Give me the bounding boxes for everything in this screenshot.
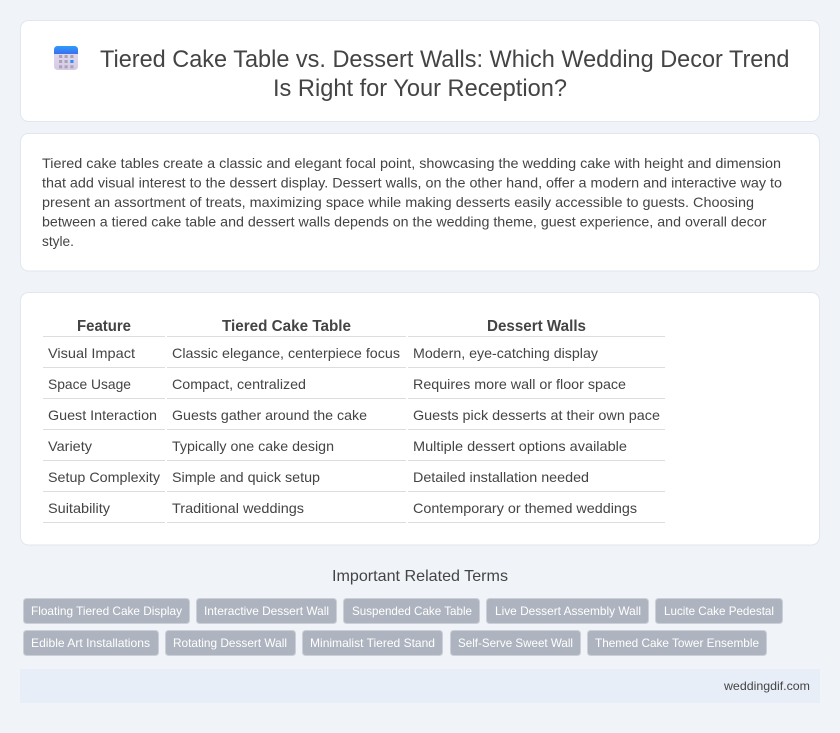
row: guest interaction	[48, 407, 660, 423]
row: visual impact: Visual Impact	[48, 345, 135, 361]
row: setup complexity	[48, 469, 589, 485]
row: setup complexity: Detailed installation needed	[413, 469, 589, 485]
row: space usage: Requires more wall or floor space	[413, 376, 626, 392]
row: suitability: Traditional weddings	[172, 500, 304, 516]
tag: Floating Tiered Cake Display	[31, 604, 182, 618]
panel: comparison table	[20, 292, 820, 545]
tag	[24, 598, 190, 624]
tag: Rotating Dessert Wall	[173, 636, 287, 650]
row: space usage: Space Usage	[48, 376, 131, 392]
row: variety	[48, 438, 627, 454]
tag: Themed Cake Tower Ensemble	[595, 636, 759, 650]
text block: description	[42, 155, 782, 249]
row: guest interaction: Guest Interaction	[48, 407, 157, 423]
table header	[77, 318, 586, 335]
row: visual impact: Classic elegance, centerpiece focus	[172, 345, 400, 361]
tag: Lucite Cake Pedestal	[664, 604, 774, 618]
text block: description: present an assortment of treats, maximizing space while making desserts easily accessible to guests. Choosing	[42, 194, 754, 210]
text block: description: that add visual interest to the dessert display. Dessert walls, on the other hand, offer a modern and interactive way to	[42, 174, 782, 190]
row: guest interaction: Guests gather around the cake	[172, 407, 367, 423]
tag: Interactive Dessert Wall	[204, 604, 329, 618]
tag	[486, 598, 648, 624]
row: space usage	[48, 376, 626, 392]
tag	[302, 630, 442, 656]
tag	[656, 598, 782, 624]
tag	[588, 630, 766, 656]
tag	[344, 598, 480, 624]
icon: calendar	[54, 46, 78, 70]
tag: Minimalist Tiered Stand	[310, 636, 435, 650]
panel: description	[20, 134, 820, 271]
tag	[166, 630, 296, 656]
tag: Suspended Cake Table	[352, 604, 472, 618]
row: variety: Variety	[48, 438, 92, 454]
tag	[196, 598, 336, 624]
row: setup complexity: Simple and quick setup	[172, 469, 320, 485]
tag	[24, 630, 158, 656]
heading: important related terms: Important Related Terms	[332, 568, 508, 585]
row: setup complexity: Setup Complexity	[48, 469, 160, 485]
table header: Feature	[77, 318, 131, 335]
title	[100, 46, 790, 102]
table header: Dessert Walls	[487, 318, 586, 335]
table header: Tiered Cake Table	[222, 318, 351, 335]
tag	[450, 630, 580, 656]
text block: description: Tiered cake tables create a classic and elegant focal point, showcasing the wedding cake with height and dimension	[42, 155, 781, 171]
row: suitability: Contemporary or themed weddings	[413, 500, 637, 516]
tag: Live Dessert Assembly Wall	[495, 604, 641, 618]
tag: Self-Serve Sweet Wall	[458, 636, 573, 650]
title: Is Right for Your Reception?	[273, 75, 567, 102]
panel: related term tags	[24, 598, 782, 656]
row: variety: Typically one cake design	[172, 438, 334, 454]
row: guest interaction: Guests pick desserts at their own pace	[413, 407, 660, 423]
text block: description: style.	[42, 233, 74, 249]
row: space usage: Compact, centralized	[172, 376, 306, 392]
text block: description: between a tiered cake table and dessert walls depends on the wedding theme, guest experience, and overall decor	[42, 214, 767, 230]
footer: weddingdif.com	[723, 679, 810, 693]
footer	[20, 669, 820, 703]
row: visual impact: Modern, eye-catching display	[413, 345, 598, 361]
row: suitability	[48, 500, 637, 516]
tag: Edible Art Installations	[31, 636, 150, 650]
panel: header	[20, 20, 820, 122]
row: visual impact	[48, 345, 598, 361]
title: Tiered Cake Table vs. Dessert Walls: Which Wedding Decor Trend	[100, 46, 790, 73]
row: suitability: Suitability	[48, 500, 110, 516]
row: variety: Multiple dessert options available	[413, 438, 627, 454]
